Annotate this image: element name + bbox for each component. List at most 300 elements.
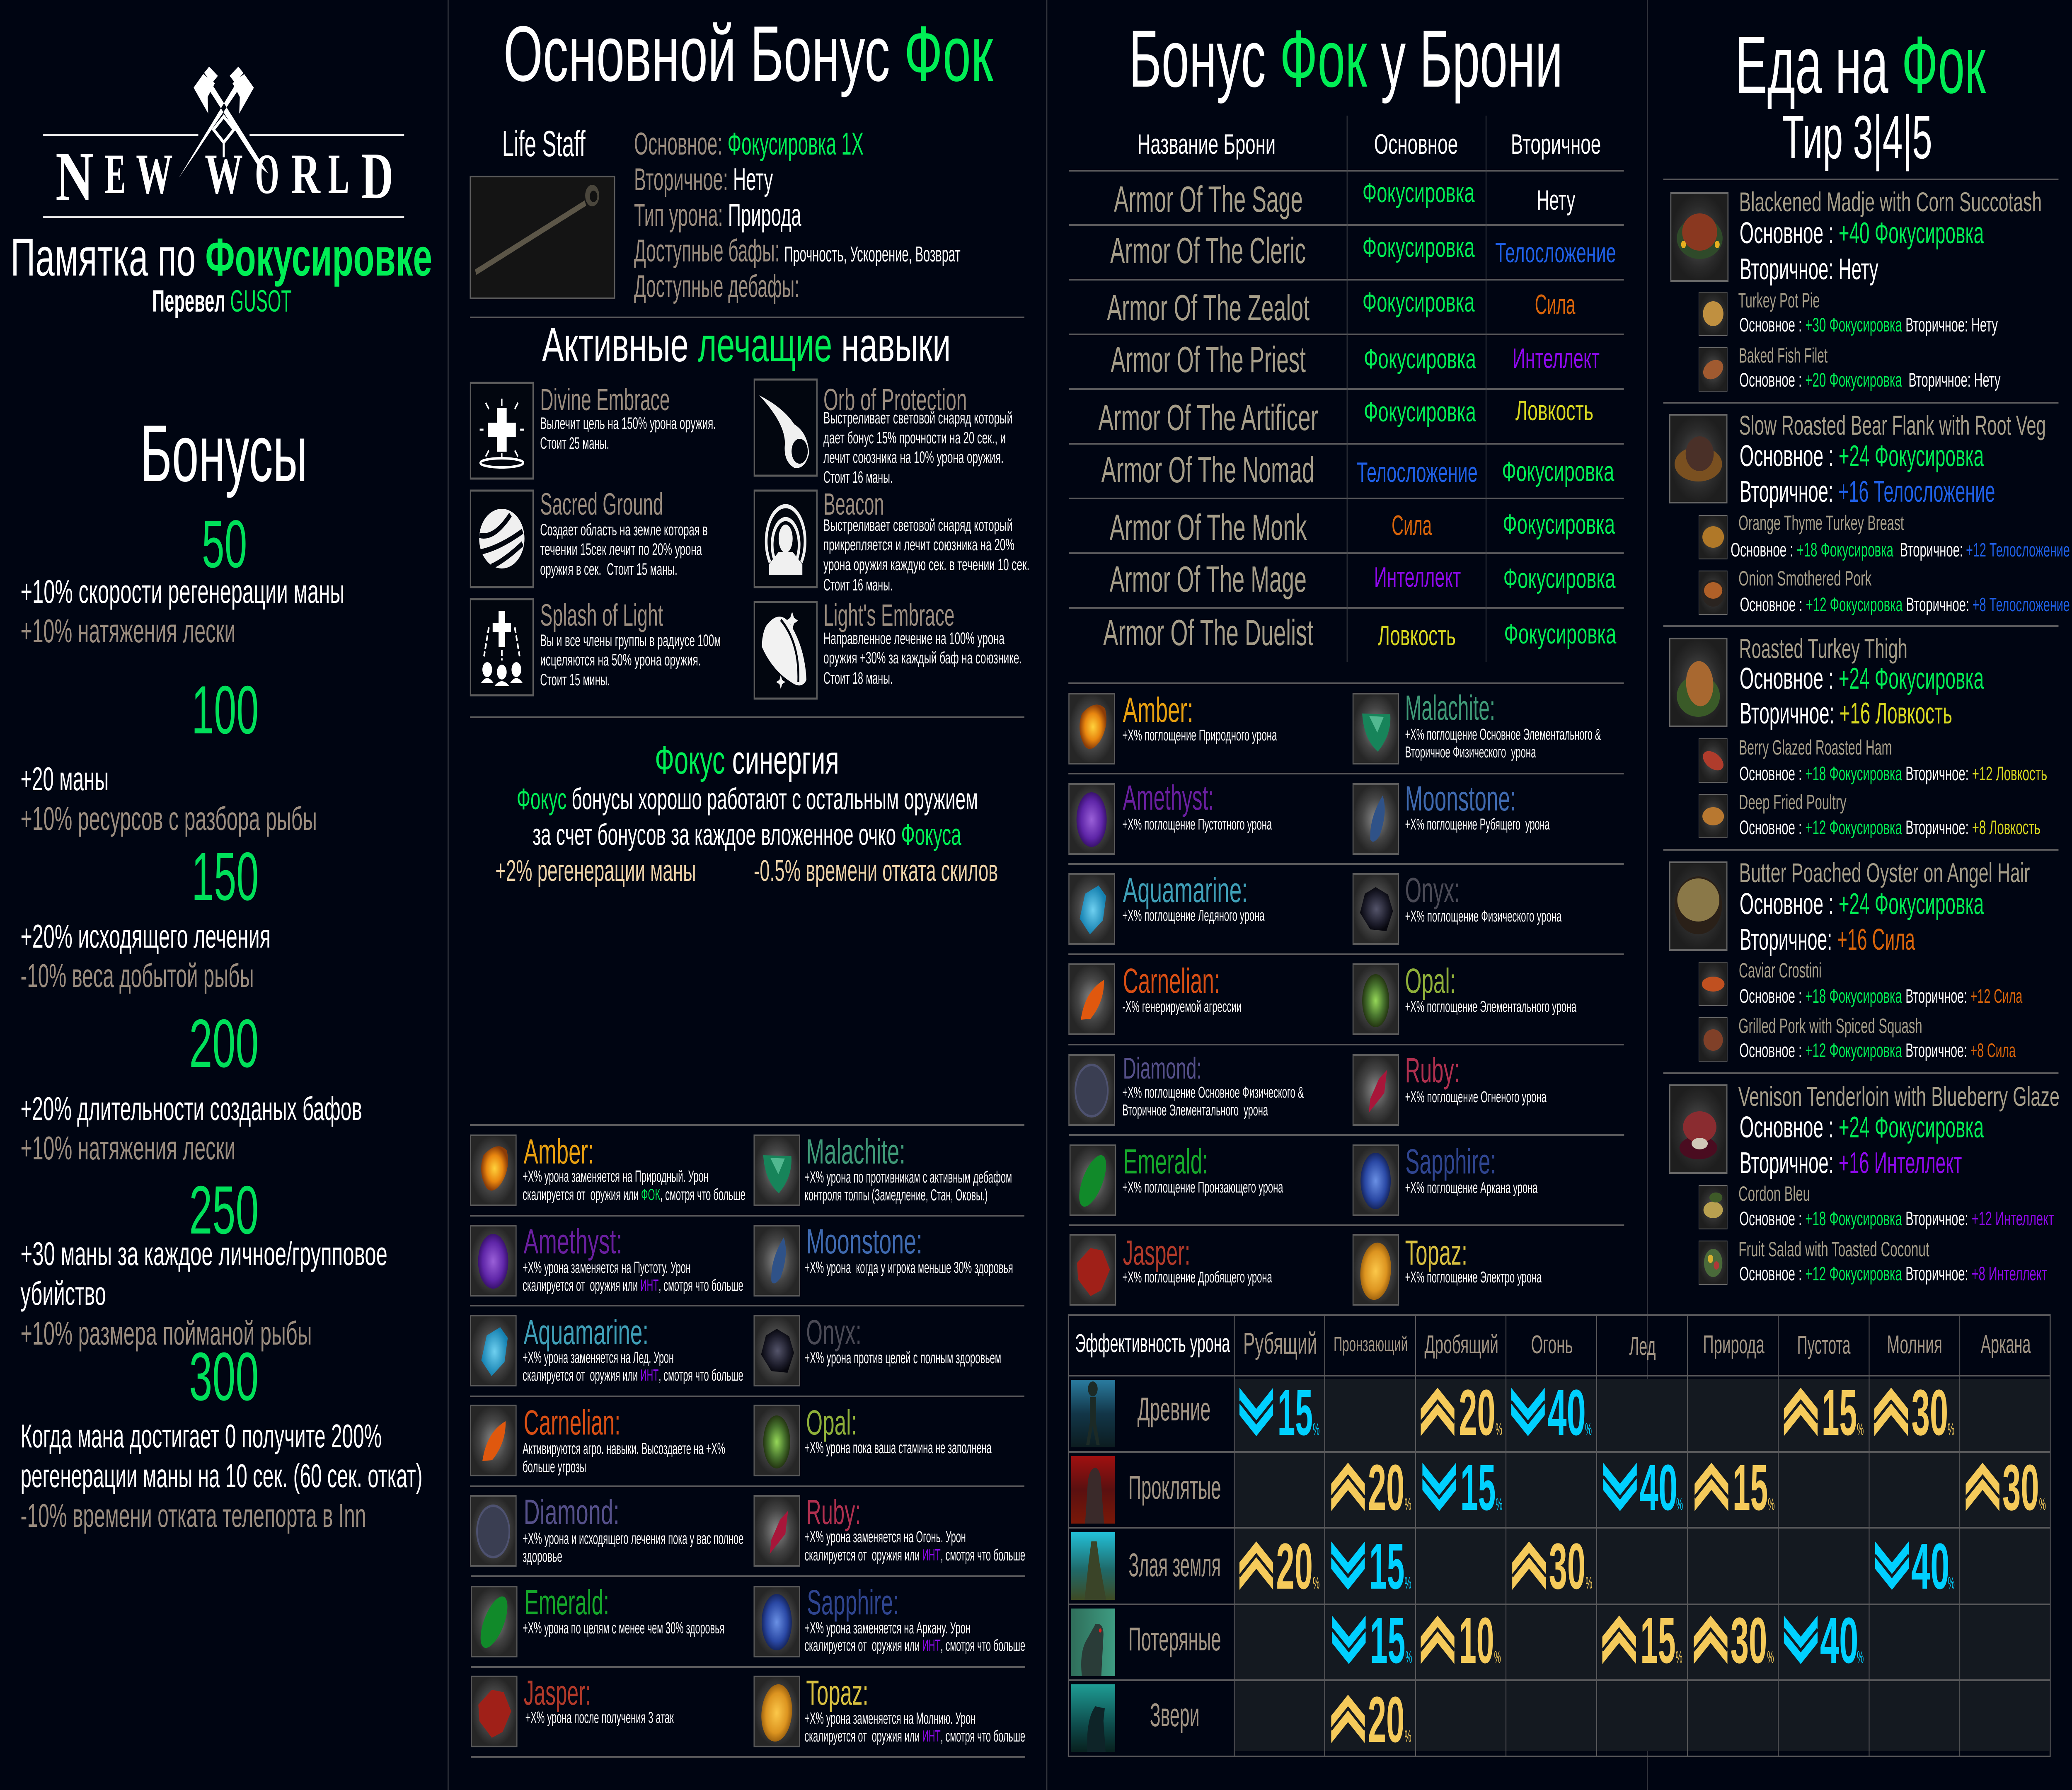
- damage modifiers: %: [1496, 1420, 1502, 1439]
- skill: Splash of Light: [470, 598, 721, 695]
- food: Butter Poached Oyster: Butter Poached Oyster on Angel Hair: [1739, 858, 2030, 888]
- logo: New World: [43, 67, 404, 217]
- armor gem: Jasper: Jasper:: [1123, 1234, 1190, 1272]
- food: Turkey Pot Pie: Вторичное: Нету: [1905, 314, 1998, 336]
- damage modifiers: 20: [1459, 1376, 1496, 1449]
- weapon gem: Malachite: контроля толпы (Замедление, Стан, Оковы.): [804, 1185, 988, 1204]
- damage modifiers: 30: [2002, 1451, 2039, 1524]
- damage modifiers: %: [1496, 1495, 1503, 1514]
- row: corrupted: Проклятые: [1128, 1469, 1221, 1506]
- skill: Light's Embrace: оружия +30% за каждый баф на союзнике.: [823, 648, 1022, 667]
- row: lost: [1071, 1609, 1221, 1676]
- skill: Beacon: Beacon: [823, 487, 884, 522]
- damage modifiers: 15: [1640, 1604, 1676, 1677]
- damage modifiers: %: [1676, 1648, 1682, 1667]
- food: Caviar Crostini: Основное : +18 Фокусировка: [1739, 986, 1903, 1007]
- food: Onion Smothered Pork: +8 Телосложение: [1973, 595, 2070, 616]
- table: armor sets: Armor Of The Monk: [1110, 507, 1307, 548]
- armor gem: Moonstone: [1353, 779, 1550, 854]
- table header: Огонь: [1531, 1330, 1573, 1359]
- armor gem: Diamond: Вторичное Элементального урона: [1122, 1101, 1268, 1119]
- food: Blackened Madje: [1671, 187, 2042, 285]
- food: Roasted Turkey Thigh: [1670, 634, 1984, 730]
- food: Orange Thyme Turkey Breast: Основное : +18 Фокусировка: [1731, 539, 1894, 561]
- food: Roasted Turkey Thigh: Основное : +24 Фокусировка: [1740, 662, 1984, 695]
- damage modifiers: 40: [1547, 1376, 1586, 1449]
- skill: Orb of Protection: дает бонус 15% прочности на 20 сек., и: [823, 428, 1006, 447]
- damage modifiers: %: [1768, 1495, 1775, 1514]
- weapon stats: Основное: Фокусировка 1X: [634, 126, 864, 162]
- food: Onion Smothered Pork: Вторичное:: [1906, 594, 1969, 616]
- weapon gem: Diamond: [470, 1493, 743, 1566]
- food: Butter Poached Oyster: Вторичное: +16 Сила: [1740, 923, 1915, 956]
- food: Slow Roasted Bear Flank: Основное : +24 Фокусировка: [1740, 439, 1984, 472]
- food: Venison Tenderloin: [1670, 1081, 2060, 1179]
- food: Slow Roasted Bear Flank: Вторичное: +16 Телосложение: [1740, 475, 1995, 508]
- skill: Sacred Ground: [470, 487, 708, 587]
- food: Fruit Salad with Toasted Coconut: Вторичное: +8 Интеллект: [1905, 1263, 2047, 1285]
- logo: New World: D: [361, 140, 393, 213]
- food: Turkey Pot Pie: Turkey Pot Pie: [1738, 289, 1820, 312]
- food: Orange Thyme Turkey Breast: Вторичное:: [1900, 539, 1963, 561]
- damage modifiers: 20: [1276, 1530, 1313, 1603]
- row: beasts: [1071, 1684, 1200, 1752]
- focus synergy block: +2% регенерации маны: [495, 854, 696, 887]
- armor gem: Ruby: +X% поглощение Огненого урона: [1405, 1088, 1547, 1105]
- food: Orange Thyme Turkey Breast: +12 Телосложение: [1966, 540, 2070, 561]
- armor gem: Malachite: +X% поглощение Основное Элементального &: [1405, 726, 1601, 743]
- weapon gem: Aquamarine: [470, 1313, 743, 1386]
- food: Caviar Crostini: [1699, 959, 2023, 1007]
- weapon gem: Topaz: скалируется от оружия или ИНТ, смотря что больше: [804, 1727, 1025, 1745]
- food: Butter Poached Oyster: Основное : +24 Фокусировка: [1740, 887, 1984, 920]
- translator credit: Перевел GUSOT: [152, 284, 292, 319]
- weapon stats: Тип урона: Природа: [634, 197, 801, 233]
- skill: Divine Embrace: [470, 383, 716, 479]
- bonus tier 300: -10% времени отката телепорта в Inn: [20, 1497, 366, 1534]
- table: armor sets: Фокусировка: [1503, 563, 1616, 594]
- food: Onion Smothered Pork: Onion Smothered Pork: [1738, 567, 1872, 590]
- armor gem: Aquamarine: +X% поглощение Ледяного урона: [1122, 907, 1265, 924]
- armor gem: Malachite: Вторичное Физического урона: [1405, 743, 1536, 761]
- armor gem: Amber: Amber:: [1123, 691, 1193, 730]
- damage modifiers: 20: [1368, 1684, 1404, 1756]
- weapon gem: Moonstone: Moonstone:: [806, 1222, 922, 1261]
- armor gem: Amethyst: +X% поглощение Пустотного урона: [1122, 815, 1272, 833]
- skill: Divine Embrace: Стоит 25 маны.: [540, 434, 609, 452]
- damage modifiers: %: [1676, 1495, 1683, 1514]
- weapon gem: Topaz: Topaz:: [806, 1674, 869, 1713]
- focus synergy block: -0.5% времени отката скилов: [754, 854, 998, 887]
- food: Fruit Salad with Toasted Coconut: [1699, 1238, 2047, 1285]
- skill: Sacred Ground: течении 15сек лечит по 20% урона: [540, 540, 702, 559]
- armor gem: Moonstone: +X% поглощение Рубящего урона: [1405, 815, 1550, 833]
- skill: Beacon: прикрепляется и лечит союзника на 20%: [823, 535, 1014, 554]
- weapon gem: Sapphire: [754, 1583, 1025, 1657]
- damage modifiers: %: [1404, 1495, 1411, 1514]
- weapon gem: Moonstone: [754, 1222, 1013, 1296]
- skill: Light's Embrace: [754, 598, 1022, 699]
- skill: Light's Embrace: Стоит 18 маны.: [823, 669, 893, 687]
- damage modifiers: %: [1494, 1648, 1501, 1667]
- food: Deep Fried Poultry: [1699, 791, 2041, 839]
- food: Grilled Pork with Spiced Squash: Вторичное: +8 Сила: [1905, 1040, 2016, 1062]
- damage modifiers: %: [1585, 1574, 1592, 1592]
- damage modifiers: 40: [1639, 1451, 1677, 1524]
- food: Berry Glazed Roasted Ham: [1699, 736, 2047, 785]
- armor gem: Topaz: +X% поглощение Электро урона: [1405, 1268, 1542, 1286]
- weapon name: life staff: Life Staff: [502, 123, 586, 164]
- row: corrupted: [1071, 1456, 1221, 1524]
- table header: Природа: [1703, 1330, 1765, 1359]
- table header: Аркана: [1981, 1330, 2031, 1359]
- bonus tier 200: +10% натяжения лески: [20, 1130, 235, 1167]
- bonus tier 100: 100: [191, 672, 259, 748]
- weapon gem: Carnelian: больше угрозы: [523, 1457, 586, 1476]
- food: Deep Fried Poultry: Вторичное: +8 Ловкость: [1905, 817, 2041, 839]
- panel: overview and bonuses: [10, 67, 432, 1534]
- armor gem: Carnelian: Carnelian:: [1123, 962, 1220, 1001]
- damage modifiers: 30: [1912, 1376, 1948, 1449]
- skill: Orb of Protection: [754, 380, 1012, 486]
- food: Blackened Madje: Blackened Madje with Corn Succotash: [1739, 187, 2042, 217]
- logo: New World: W: [205, 143, 243, 206]
- weapon stats: Прочность, Ускорение, Возврат: [784, 242, 961, 266]
- focus synergy block: Фокус синергия: [655, 738, 839, 782]
- armor gem: Topaz: [1353, 1234, 1542, 1305]
- damage modifiers: %: [1857, 1648, 1864, 1667]
- food: Blackened Madje: Вторичное: Нету: [1740, 252, 1878, 285]
- table: armor sets: Фокусировка: [1503, 509, 1615, 540]
- armor gem: Ruby: [1353, 1051, 1547, 1125]
- skill: Beacon: Стоит 16 маны.: [823, 576, 893, 594]
- table: armor sets: Armor Of The Artificer: [1098, 397, 1318, 438]
- icon: life staff: [470, 177, 615, 298]
- damage modifiers: 30: [1549, 1530, 1585, 1603]
- food: Berry Glazed Roasted Ham: Вторичное: +12 Ловкость: [1905, 763, 2047, 785]
- food: Deep Fried Poultry: Основное : +12 Фокусировка: [1739, 817, 1903, 839]
- weapon gem: Carnelian: Активируются агро. навыки. Высоздаете на +X%: [523, 1439, 725, 1457]
- damage modifiers: %: [1313, 1574, 1319, 1592]
- table: armor sets: Сила: [1535, 289, 1575, 320]
- logo: New World: W: [136, 143, 173, 206]
- table: armor sets: Фокусировка: [1363, 287, 1475, 318]
- logo: New World: R: [291, 143, 321, 206]
- weapon gem: Jasper: +X% урона после получения 3 атак: [525, 1708, 674, 1726]
- table header: Лед: [1629, 1332, 1656, 1361]
- bonus tier 50: +10% натяжения лески: [20, 613, 235, 650]
- table: armor sets: Armor Of The Cleric: [1110, 230, 1306, 271]
- damage modifiers: %: [1404, 1727, 1411, 1746]
- weapon gem: Jasper: Jasper:: [524, 1674, 591, 1713]
- armor gem: Opal: Opal:: [1405, 962, 1456, 1001]
- food: Deep Fried Poultry: Deep Fried Poultry: [1739, 791, 1847, 814]
- table: damage effectiveness: [1068, 1315, 2050, 1756]
- food: Blackened Madje: Основное : +40 Фокусировка: [1740, 216, 1984, 249]
- row: ancients: Древние: [1138, 1391, 1210, 1428]
- damage modifiers: %: [1767, 1648, 1774, 1667]
- row: lost: Потеряные: [1128, 1621, 1221, 1658]
- table: armor sets: Armor Of The Mage: [1110, 559, 1307, 600]
- armor gem: Moonstone: Moonstone:: [1405, 779, 1516, 818]
- weapon gem: Ruby: [754, 1493, 1025, 1566]
- focus synergy block: Фокус бонусы хорошо работают с остальным оружием: [517, 782, 978, 815]
- food: Roasted Turkey Thigh: Вторичное: +16 Ловкость: [1740, 697, 1952, 730]
- weapon gem: Diamond: здоровье: [523, 1547, 562, 1565]
- skill: Orb of Protection: лечит союзника на 10% урона оружия.: [823, 448, 1004, 467]
- food: Turkey Pot Pie: Основное : +30 Фокусировка: [1739, 314, 1903, 336]
- skill: Divine Embrace: Вылечит цель на 150% урона оружия.: [540, 414, 716, 433]
- food: Grilled Pork with Spiced Squash: [1699, 1014, 2016, 1062]
- focus synergy block: [495, 738, 998, 887]
- table: armor sets: Фокусировка: [1364, 397, 1476, 428]
- damage modifiers: 40: [1911, 1530, 1949, 1603]
- food: Venison Tenderloin: Venison Tenderloin with Blueberry Glaze: [1738, 1081, 2060, 1112]
- damage modifiers: 15: [1733, 1451, 1768, 1524]
- armor gem: Opal: +X% поглощение Элементального урона: [1405, 998, 1576, 1015]
- armor gem: Malachite: Malachite:: [1405, 689, 1495, 728]
- damage modifiers: %: [1313, 1420, 1319, 1439]
- damage modifiers: 15: [1370, 1604, 1405, 1677]
- logo: New World: E: [105, 143, 126, 206]
- table: armor sets: Основное: [1374, 129, 1458, 160]
- heading: tier: Тир 3|4|5: [1782, 103, 1932, 172]
- weapon gem: Carnelian: Carnelian:: [524, 1403, 620, 1442]
- skill: Light's Embrace: Направленное лечение на 100% урона: [823, 629, 1005, 648]
- weapon gem: Sapphire: +X% урона заменяется на Аркану. Урон: [804, 1618, 971, 1637]
- bonus tier 250: +10% размера пойманой рыбы: [20, 1315, 312, 1352]
- weapon gem: Onyx: [754, 1313, 1001, 1386]
- bonus tier 100: +20 маны: [20, 761, 109, 798]
- table: armor sets: Сила: [1392, 510, 1432, 541]
- row: ancients: [1071, 1380, 1210, 1447]
- damage modifiers: %: [1405, 1648, 1412, 1667]
- weapon gem: Onyx: +X% урона против целей с полным здоровьем: [804, 1348, 1001, 1367]
- weapon gem: Aquamarine: +X% урона заменяется на Лед. Урон: [523, 1348, 674, 1366]
- bonus tier 250: [20, 1172, 387, 1352]
- skill: Sacred Ground: Sacred Ground: [540, 487, 663, 522]
- food: Slow Roasted Bear Flank: [1670, 410, 2046, 508]
- skill: Sacred Ground: Создает область на земле которая в: [540, 520, 708, 539]
- table: armor sets: Ловкость: [1515, 395, 1593, 426]
- weapon gem: Moonstone: +X% урона когда у игрока меньше 30% здоровья: [804, 1258, 1013, 1276]
- food: Turkey Pot Pie: [1699, 289, 1998, 336]
- weapon gem: Aquamarine: Aquamarine:: [524, 1313, 649, 1352]
- weapon gem: Malachite: Malachite:: [806, 1132, 905, 1171]
- weapon gem: Opal: +X% урона пока ваша стамина не заполнена: [804, 1438, 992, 1456]
- armor gem: Onyx: [1353, 871, 1561, 944]
- damage modifiers: 15: [1460, 1451, 1496, 1524]
- armor gem: Ruby: Ruby:: [1405, 1051, 1460, 1090]
- armor gem: Amethyst: [1069, 779, 1272, 854]
- skill: Splash of Light: Splash of Light: [540, 598, 663, 633]
- weapon gem: Amber: Amber:: [524, 1132, 594, 1171]
- armor gem: Diamond: Diamond:: [1123, 1052, 1202, 1085]
- table: armor sets: Фокусировка: [1504, 619, 1616, 650]
- armor gem: Diamond: [1069, 1052, 1304, 1125]
- food: Onion Smothered Pork: Основное : +12 Фокусировка: [1740, 594, 1903, 616]
- bonus tier 150: +20% исходящего лечения: [20, 918, 271, 955]
- armor gem: Carnelian: [1069, 962, 1242, 1034]
- armor gem: Onyx: +X% поглощение Физического урона: [1405, 907, 1561, 925]
- food: Butter Poached Oyster: [1670, 858, 2030, 956]
- logo: New World: L: [328, 143, 349, 206]
- damage modifiers: %: [1948, 1420, 1954, 1439]
- table: armor sets: Интеллект: [1513, 343, 1600, 374]
- panel: armor focus bonus: [1068, 13, 1624, 1305]
- weapon gem: Amber: [470, 1132, 746, 1205]
- logo: New World: O: [255, 143, 279, 206]
- table: armor sets: Нету: [1537, 185, 1576, 216]
- food: Onion Smothered Pork: [1699, 567, 2070, 616]
- table header: Пронзающий: [1334, 1333, 1408, 1356]
- bonus tier 150: -10% веса добытой рыбы: [20, 958, 254, 994]
- armor gem: Topaz: Topaz:: [1405, 1234, 1467, 1272]
- weapon stats: [634, 126, 961, 304]
- heading: bonuses: Бонусы: [140, 409, 307, 498]
- armor gem: Amber: [1069, 691, 1277, 764]
- armor gem: Onyx: Onyx:: [1405, 871, 1460, 910]
- bonus tier 100: [20, 672, 317, 837]
- weapon gem: Amethyst: +X% урона заменяется на Пустоту. Урон: [523, 1258, 691, 1276]
- food: Caviar Crostini: Вторичное: +12 Сила: [1905, 986, 2023, 1007]
- food: Slow Roasted Bear Flank: Slow Roasted Bear Flank with Root Veg: [1739, 410, 2046, 440]
- skill: Light's Embrace: Light's Embrace: [823, 598, 954, 633]
- bonus tier 250: убийство: [20, 1275, 106, 1312]
- heading: main focus bonus: Основной Бонус Фок: [503, 10, 993, 97]
- damage modifiers: 15: [1822, 1376, 1857, 1449]
- weapon gem: Sapphire: Sapphire:: [807, 1583, 899, 1622]
- bonus tier 300: регенерации маны на 10 сек. (60 сек. откат): [20, 1458, 423, 1495]
- skill: Splash of Light: исцеляются на 50% урона оружия.: [540, 651, 701, 669]
- weapon gem: Amethyst: [470, 1222, 743, 1296]
- skill: Beacon: [754, 487, 1029, 594]
- food: Berry Glazed Roasted Ham: Основное : +18 Фокусировка: [1739, 763, 1903, 785]
- damage modifiers: 40: [1820, 1604, 1858, 1677]
- weapon gem: Opal: Opal:: [806, 1403, 857, 1442]
- table header: Молния: [1887, 1330, 1942, 1359]
- armor gem: Carnelian: -X% генерируемой агрессии: [1122, 998, 1242, 1015]
- food: Grilled Pork with Spiced Squash: Grilled Pork with Spiced Squash: [1738, 1014, 1922, 1038]
- bonus tier 50: [20, 506, 344, 650]
- table: armor sets: Телосложение: [1495, 237, 1616, 268]
- row: angry earth: Злая земля: [1128, 1547, 1221, 1584]
- weapon gem: Amber: скалируется от оружия или ФОК, смотря что больше: [523, 1185, 746, 1203]
- table: armor sets: [1069, 116, 1624, 662]
- bonus tier 50: 50: [202, 506, 247, 582]
- table: armor sets: Название Брони: [1138, 129, 1276, 160]
- food: Berry Glazed Roasted Ham: Berry Glazed Roasted Ham: [1739, 736, 1892, 759]
- damage modifiers: 10: [1459, 1604, 1494, 1677]
- armor gem: Opal: [1353, 962, 1576, 1034]
- weapon gem: Ruby: +X% урона заменяется на Огонь. Урон: [804, 1527, 966, 1546]
- weapon gem: Topaz: +X% урона заменяется на Молнию. Урон: [804, 1709, 975, 1727]
- table: armor sets: Фокусировка: [1363, 232, 1475, 263]
- food: Baked Fish Filet: Baked Fish Filet: [1739, 344, 1828, 367]
- skill: Orb of Protection: Orb of Protection: [823, 383, 967, 417]
- food: Cordon Bleu: [1699, 1182, 2054, 1230]
- panel: main focus bonus: [470, 10, 1029, 1757]
- weapon stats: Доступные дебафы:: [634, 268, 799, 304]
- armor gem: Emerald: Emerald:: [1123, 1142, 1208, 1181]
- weapon gem: Emerald: [471, 1583, 724, 1657]
- armor gem: Emerald: [1070, 1142, 1283, 1215]
- food: Roasted Turkey Thigh: Roasted Turkey Thigh: [1739, 634, 1907, 664]
- armor gem: Sapphire: +X% поглощение Аркана урона: [1405, 1179, 1537, 1196]
- table: armor sets: Armor Of The Zealot: [1107, 288, 1310, 328]
- armor gem: Aquamarine: Aquamarine:: [1123, 871, 1248, 910]
- armor gem: Amber: +X% поглощение Природного урона: [1122, 726, 1277, 744]
- panel: food: [1663, 19, 2070, 1285]
- skill: Beacon: урона оружия каждую сек. в течении 10 сек.: [823, 555, 1029, 574]
- armor gem: Emerald: +X% поглощение Пронзающего урона: [1122, 1178, 1283, 1196]
- bonus tier 150: 150: [191, 838, 259, 915]
- bonus tier 100: +10% ресурсов с разбора рыбы: [20, 801, 317, 837]
- armor gem: Amethyst: Amethyst:: [1123, 779, 1214, 818]
- damage modifiers: %: [1948, 1574, 1955, 1592]
- weapon gem: Jasper: [471, 1674, 674, 1746]
- damage modifiers: 30: [1731, 1604, 1767, 1677]
- food: Grilled Pork with Spiced Squash: Основное : +12 Фокусировка: [1739, 1040, 1903, 1062]
- skill: Beacon: Выстреливает световой снаряд который: [823, 516, 1012, 535]
- weapon gem: Sapphire: скалируется от оружия или ИНТ, смотря что больше: [804, 1636, 1025, 1654]
- armor gem: Jasper: +X% поглощение Дробящего урона: [1122, 1268, 1272, 1286]
- food: Fruit Salad with Toasted Coconut: Fruit Salad with Toasted Coconut: [1738, 1238, 1929, 1261]
- logo: New World: N: [56, 138, 94, 215]
- skill: Sacred Ground: оружия в сек. Стоит 15 маны.: [540, 560, 678, 578]
- food: Venison Tenderloin: Вторичное: +16 Интеллект: [1740, 1146, 1962, 1179]
- weapon gem: Amethyst: Amethyst:: [524, 1222, 622, 1261]
- bonus tier 300: [20, 1338, 423, 1534]
- damage modifiers: %: [1857, 1420, 1864, 1439]
- armor gem: Jasper: [1070, 1234, 1272, 1305]
- bonus tier 250: 250: [189, 1172, 259, 1248]
- focus synergy block: за счет бонусов за каждое вложенное очко Фокуса: [533, 818, 961, 851]
- weapon gem: Opal: [754, 1403, 992, 1476]
- food: Orange Thyme Turkey Breast: [1699, 511, 2070, 561]
- food: Venison Tenderloin: Основное : +24 Фокусировка: [1740, 1110, 1984, 1144]
- food: Caviar Crostini: Caviar Crostini: [1739, 959, 1822, 982]
- table: armor sets: Armor Of The Nomad: [1101, 450, 1314, 490]
- food: Cordon Bleu: Cordon Bleu: [1738, 1182, 1810, 1205]
- table: armor sets: Фокусировка: [1364, 343, 1476, 375]
- weapon gem: Topaz: [754, 1674, 1025, 1747]
- bonus tier 150: [20, 838, 271, 994]
- table: armor sets: Фокусировка: [1363, 177, 1475, 208]
- skill: Orb of Protection: Выстреливает световой снаряд который: [823, 409, 1012, 427]
- food: Baked Fish Filet: Основное : +20 Фокусировка: [1739, 370, 1903, 391]
- table: armor sets: Телосложение: [1357, 457, 1478, 488]
- damage modifiers: %: [2039, 1495, 2046, 1514]
- armor gem: Diamond: +X% поглощение Основное Физического &: [1122, 1084, 1304, 1101]
- damage modifiers: 15: [1369, 1530, 1404, 1603]
- table: armor sets: Фокусировка: [1502, 456, 1614, 487]
- food: Cordon Bleu: Вторичное: +12 Интеллект: [1905, 1208, 2054, 1230]
- skill: Orb of Protection: Стоит 16 маны.: [823, 468, 893, 486]
- heading: armor focus bonus: Бонус Фок у Брони: [1129, 13, 1563, 104]
- weapon gem: Malachite: +X% урона по противникам с активным дебафом: [804, 1168, 1012, 1186]
- weapon gem: Diamond: +X% урона и исходящего лечения пока у вас полное: [523, 1529, 743, 1547]
- armor gem: Aquamarine: [1069, 871, 1265, 944]
- weapon gem: Amethyst: скалируется от оружия или ИНТ, смотря что больше: [523, 1276, 743, 1294]
- table: armor sets: Ловкость: [1378, 620, 1456, 651]
- row: beasts: Звери: [1150, 1697, 1200, 1734]
- damage modifiers: [1239, 1376, 2046, 1756]
- bonus tier 200: [20, 1005, 362, 1167]
- food: Cordon Bleu: Основное : +18 Фокусировка: [1739, 1208, 1903, 1230]
- armor gem: Malachite: [1353, 689, 1601, 764]
- row: angry earth: [1071, 1532, 1221, 1600]
